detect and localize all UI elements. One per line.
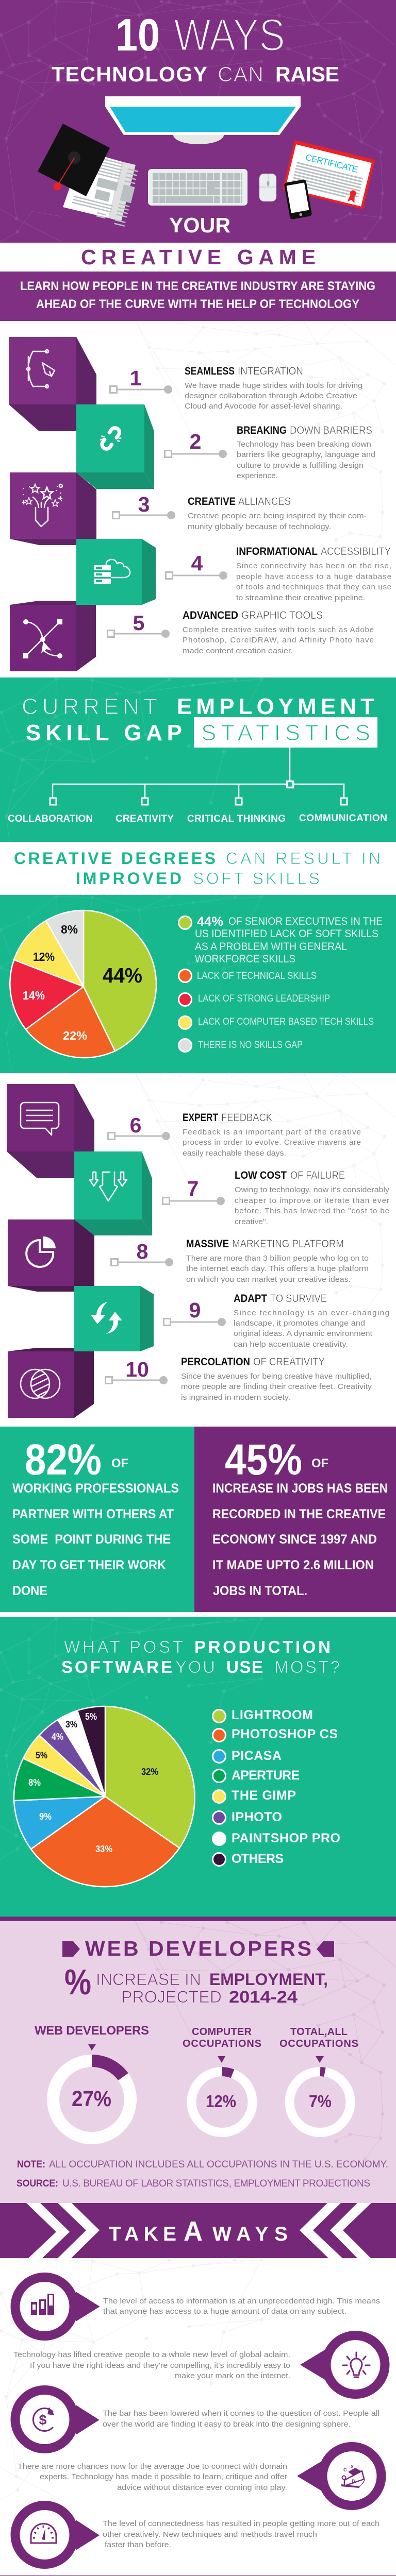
number 3: 3 xyxy=(138,493,150,516)
pin: gauge xyxy=(15,2505,100,2564)
heading: PRODUCTION xyxy=(194,1637,331,1656)
text xyxy=(103,2409,380,2429)
connector xyxy=(107,630,170,638)
item text xyxy=(181,1372,372,1402)
panel: soft skills chart xyxy=(0,895,396,1073)
item title: ADVANCED xyxy=(183,609,238,621)
icon: phone xyxy=(284,179,312,219)
icon: keyboard xyxy=(148,169,248,206)
panel: skill gap statistics xyxy=(0,677,396,842)
icon: sync arrows xyxy=(91,1302,122,1334)
heading: SOFTWARE xyxy=(61,1657,172,1676)
item title xyxy=(237,425,372,436)
number 6: 6 xyxy=(130,1113,141,1137)
text: The level of connectedness has resulted in people getting more out of each xyxy=(103,2519,380,2528)
item 10 xyxy=(105,1356,372,1402)
legend: APERTURE xyxy=(232,1768,300,1783)
item title: GRAPHIC TOOLS xyxy=(241,609,323,621)
pin: online learning xyxy=(297,2447,382,2505)
item title xyxy=(183,609,323,621)
legend: 44% xyxy=(197,914,223,929)
item title: MASSIVE xyxy=(186,1238,229,1250)
pie labels: 9% xyxy=(39,1811,52,1822)
number 7: 7 xyxy=(187,1177,199,1200)
donut: web developers xyxy=(35,2024,149,2138)
text: that anyone has access to a huge amount of data on any subject. xyxy=(103,2307,346,2316)
item text: Since technology is an ever-changing xyxy=(234,1309,389,1317)
cube 5 xyxy=(10,601,96,671)
item title xyxy=(181,1356,325,1368)
connector xyxy=(164,1318,226,1326)
icon: mouse xyxy=(259,174,276,201)
heading: USE xyxy=(226,1657,263,1676)
connector xyxy=(110,385,172,394)
item text: There are more than 3 billion people who log on to xyxy=(186,1254,369,1263)
item text: process in order to evolve. Creative mavens are xyxy=(183,1138,361,1147)
legend: PICASA xyxy=(232,1749,282,1763)
pin: dollar cycle: $ xyxy=(39,2412,47,2428)
panel: intro band xyxy=(0,272,396,321)
pie chart: software xyxy=(14,1706,195,1887)
item title xyxy=(234,1293,327,1304)
text: make your mark on the internet. xyxy=(175,2371,290,2380)
connector xyxy=(105,1376,168,1384)
legend: PHOTOSHOP CS xyxy=(232,1727,338,1741)
heading: WHAT POST xyxy=(64,1637,183,1656)
takeaway 5 xyxy=(15,2505,380,2564)
item text: cheaper to improve or iterate than ever xyxy=(235,1196,389,1205)
icon: curves xyxy=(23,619,62,658)
cube 7 xyxy=(74,1151,152,1235)
icon: pie chart xyxy=(26,1236,56,1267)
item title xyxy=(236,546,391,557)
icon: venn diagram xyxy=(20,1368,61,1399)
subheading: increase in employment: INCREASE IN xyxy=(96,1970,201,1989)
skill labels: CREATIVITY xyxy=(116,814,174,824)
panel: takeaways xyxy=(0,2258,385,2564)
panel: 82 percent stat: DAY TO GET THEIR WORK xyxy=(12,1558,166,1572)
item text: Cloud and Avocode for asset-level sharing. xyxy=(185,402,342,411)
heading: statistics box: STATISTICS xyxy=(201,720,370,745)
legend: LACK OF TECHNICAL SKILLS xyxy=(197,971,317,981)
item title: FEEDBACK xyxy=(221,1112,272,1124)
item text: more people are finding their creative feet. Creativity xyxy=(181,1382,372,1391)
item title: INFORMATIONAL xyxy=(236,546,318,557)
item title: DOWN BARRIERS xyxy=(290,425,372,436)
donut: computer occupations: 12% xyxy=(206,2092,236,2111)
icon: certificate xyxy=(283,140,375,209)
pie labels: 12% xyxy=(33,950,55,963)
number 1: 1 xyxy=(130,366,141,390)
item text: before. This has lowered the "cost to be xyxy=(235,1207,389,1215)
icon: down arrows xyxy=(90,1172,127,1201)
pie labels: 5% xyxy=(36,1750,47,1760)
icon: newspaper xyxy=(63,150,140,226)
item text: on which you can market your creative ideas. xyxy=(186,1275,351,1284)
donut: computer occupations: OCCUPATIONS xyxy=(183,2038,261,2049)
item text xyxy=(186,1254,369,1284)
item text: culture to provide a fulfilling design xyxy=(237,461,364,470)
item text: the internet each day. This offers a huge platform xyxy=(186,1264,369,1273)
item text: Complete creative suites with tools such as Adobe xyxy=(183,625,374,634)
takeaway 2 xyxy=(13,2335,385,2394)
item title: MARKETING PLATFORM xyxy=(232,1238,344,1250)
text: There are more chances now for the average Joe to connect with domain xyxy=(18,2462,287,2471)
item 3 xyxy=(112,493,367,531)
item text: made content creation easier. xyxy=(183,647,293,655)
connector xyxy=(112,511,175,519)
text xyxy=(13,2350,290,2380)
donut: web developers: 27% xyxy=(72,2087,111,2111)
cube 4 xyxy=(76,539,156,605)
panel: 82 percent stat: SOME POINT DURING THE xyxy=(12,1532,171,1547)
item 1 xyxy=(110,365,362,411)
panel: 45 percent stat: OF xyxy=(311,1456,328,1470)
item text: Technology has been breaking down xyxy=(237,440,371,449)
panel: 45 percent stat xyxy=(194,1427,396,1612)
pin: online learning: C xyxy=(343,2467,347,2472)
text: faster than before. xyxy=(105,2540,171,2549)
panel: 45 percent stat: RECORDED IN THE CREATIVE xyxy=(212,1507,386,1521)
item title: EXPERT xyxy=(183,1112,218,1124)
panel: web developers xyxy=(0,1917,396,2203)
item text: munity globally because of technology. xyxy=(188,522,331,531)
item text: can help accentuate creativity. xyxy=(234,1340,348,1349)
item title: PERCOLATION xyxy=(181,1356,250,1368)
heading: creative degrees: CAN RESULT IN xyxy=(226,849,381,868)
heading: creative degrees xyxy=(14,849,381,888)
connector xyxy=(163,1197,225,1205)
legend: WORKFORCE SKILLS xyxy=(195,953,295,965)
note and source: SOURCE: xyxy=(16,2178,58,2189)
pie labels: 32% xyxy=(141,1767,158,1777)
item title xyxy=(188,496,291,507)
pin: light bulb xyxy=(300,2335,385,2394)
text: other creatively. New techniques and methods travel much xyxy=(103,2530,317,2539)
legend xyxy=(178,914,383,1052)
heading: creative degrees: SOFT SKILLS xyxy=(193,869,320,888)
panel: 82 percent stat: PARTNER WITH OTHERS AT xyxy=(12,1507,174,1521)
item title xyxy=(183,1112,272,1124)
panel: 82 percent stat xyxy=(0,1427,194,1612)
item text: Creative people are being inspired by their com- xyxy=(188,512,367,520)
title: technology can raise: TECHNOLOGY xyxy=(52,62,207,86)
donut: total all occupations: TOTAL,ALL xyxy=(290,2026,348,2038)
number 5: 5 xyxy=(133,611,144,635)
connector xyxy=(108,1132,170,1140)
legend: THERE IS NO SKILLS GAP xyxy=(198,1040,303,1050)
note and source: NOTE: xyxy=(17,2159,45,2170)
item text: Owing to technology, now it's considerably xyxy=(235,1185,390,1194)
donut: computer occupations: COMPUTER xyxy=(192,2026,252,2038)
cube 6 xyxy=(7,1084,94,1178)
icon: graduation cap xyxy=(38,124,110,196)
legend: LACK OF STRONG LEADERSHIP xyxy=(198,993,330,1004)
item title xyxy=(185,365,303,377)
heading: creative degrees: CREATIVE DEGREES xyxy=(14,849,216,868)
panel: 45 percent stat: ECONOMY SINCE 1997 AND xyxy=(212,1532,377,1547)
legend xyxy=(212,1708,340,1866)
item text xyxy=(188,512,367,531)
number 2: 2 xyxy=(190,430,201,453)
item title: LOW COST xyxy=(235,1170,287,1181)
skill labels: COMMUNICATION xyxy=(299,813,387,824)
panel: 45 percent stat: 45% xyxy=(225,1435,302,1484)
icon: broken link xyxy=(96,423,125,453)
number 8: 8 xyxy=(137,1240,148,1263)
donut: total all occupations: OCCUPATIONS xyxy=(279,2038,358,2049)
title: technology can raise xyxy=(52,62,339,86)
item title: BREAKING xyxy=(237,425,287,436)
item title: TO SURVIVE xyxy=(270,1293,327,1304)
item text: landscape, it promotes change and xyxy=(234,1319,365,1328)
item text: designer collaboration through Adobe Creative xyxy=(185,392,357,400)
note and source: U.S. BUREAU OF LABOR STATISTICS, EMPLOYMENT PROJECTIONS xyxy=(62,2178,370,2189)
item text xyxy=(183,1128,361,1158)
title: 10 ways xyxy=(116,9,285,60)
heading: skill gap: SKILL GAP xyxy=(26,720,182,745)
icon: certificate: CERTIFICATE xyxy=(305,152,359,175)
item text: barriers like geography, language and xyxy=(237,450,375,459)
item title: ADAPT xyxy=(234,1293,267,1304)
item title: INTEGRATION xyxy=(238,365,303,377)
title: 10 ways: 10 xyxy=(116,9,160,60)
heading xyxy=(61,1637,340,1676)
item text: people have access to a huge database xyxy=(236,572,391,581)
text xyxy=(103,2519,380,2549)
item title: OF CREATIVITY xyxy=(253,1356,325,1368)
panel: 82 percent stat: WORKING PROFESSIONALS xyxy=(12,1481,179,1496)
item 9 xyxy=(164,1293,389,1349)
panel: 45 percent stat: JOBS IN TOTAL. xyxy=(213,1584,307,1598)
pie labels: 8% xyxy=(61,923,78,936)
text xyxy=(103,2297,380,2316)
donut: total all occupations: 7% xyxy=(309,2092,332,2111)
item text: to streamline their creative pipeline. xyxy=(236,594,365,602)
donut: computer occupations xyxy=(183,2026,261,2132)
cube 3 xyxy=(10,472,96,545)
number 9: 9 xyxy=(189,1298,201,1322)
legend: OTHERS xyxy=(232,1852,284,1866)
subheading: increase in employment: EMPLOYMENT, xyxy=(209,1970,328,1989)
note and source xyxy=(16,2159,388,2189)
legend: LACK OF COMPUTER BASED TECH SKILLS xyxy=(198,1016,374,1027)
legend: US IDENTIFIED LACK OF SOFT SKILLS xyxy=(195,928,378,940)
panel: takeaways banner: TAKE xyxy=(109,2223,176,2245)
note and source: ALL OCCUPATION INCLUDES ALL OCCUPATIONS IN THE U.S. ECONOMY. xyxy=(49,2159,388,2170)
panel: 82 percent stat: 82% xyxy=(25,1435,102,1484)
panel: post production software xyxy=(0,1617,396,1917)
panel: takeaways banner xyxy=(0,2203,396,2258)
pie labels: 14% xyxy=(23,989,45,1002)
item text: Since the avenues for being creative have multiplied, xyxy=(181,1372,372,1381)
title: your: YOUR xyxy=(169,213,230,237)
panel: ways 1 to 5 xyxy=(9,318,396,671)
item text xyxy=(185,381,362,411)
cube 1 xyxy=(9,337,96,431)
panel: 82 percent stat: OF xyxy=(111,1456,128,1470)
icon: creative fireworks xyxy=(22,484,62,527)
panel: header xyxy=(0,0,396,243)
text: If you have the right ideas and they're compelling, it's incredibly easy to xyxy=(30,2361,290,2370)
panel: takeaways banner: A xyxy=(184,2216,203,2247)
subheading: increase in employment: % xyxy=(64,1962,91,2002)
item text: original ideas. A dynamic environment xyxy=(234,1329,373,1338)
item text: easily reachable these days. xyxy=(183,1149,286,1158)
connector xyxy=(166,571,227,580)
pie chart: soft skills xyxy=(10,910,156,1058)
pin: dollar cycle xyxy=(15,2390,100,2449)
donut: web developers: WEB DEVELOPERS xyxy=(35,2024,149,2038)
pin: bars xyxy=(15,2277,100,2336)
item title: CREATIVE xyxy=(188,496,236,507)
pie labels: 4% xyxy=(52,1732,63,1742)
heading: creative degrees: IMPROVED xyxy=(76,869,182,888)
icon: pen tool xyxy=(27,350,55,388)
item 8 xyxy=(111,1238,369,1284)
panel: sources footer xyxy=(0,2575,396,2576)
item 7 xyxy=(163,1170,390,1226)
number 4: 4 xyxy=(191,551,203,575)
takeaway 3 xyxy=(15,2390,380,2449)
item text: Feedback is an important part of the creative xyxy=(183,1128,361,1137)
heading: YOU xyxy=(175,1657,215,1676)
pie labels: 22% xyxy=(63,1029,87,1042)
panel: 45 percent stat: IT MADE UPTO 2.6 MILLION xyxy=(212,1558,374,1572)
icon: monitor xyxy=(105,96,301,144)
pie labels: 5% xyxy=(85,1711,97,1722)
heading: web developers: WEB DEVELOPERS xyxy=(85,1937,311,1960)
title: technology can raise: CAN xyxy=(218,62,263,86)
skill labels: CRITICAL THINKING xyxy=(187,814,286,824)
pie labels: 33% xyxy=(95,1844,112,1854)
panel: ways 6 to 10 xyxy=(7,1072,396,1418)
heading: creative game: CREATIVE GAME xyxy=(81,245,316,269)
icon: cloud servers xyxy=(94,560,130,584)
item text xyxy=(183,625,374,655)
pie labels xyxy=(28,1711,158,1854)
legend: THE GIMP xyxy=(232,1788,296,1803)
connector xyxy=(165,450,227,458)
cube 10 xyxy=(8,1348,94,1418)
text: The bar has been lowered when it comes to the question of cost. People all xyxy=(103,2409,380,2418)
text: over the world are finding it easy to break into the designing sphere. xyxy=(103,2420,351,2429)
item 5 xyxy=(107,609,374,655)
heading: current employment: EMPLOYMENT xyxy=(177,694,374,719)
text: experts. Technology has made it possible to learn, critique and offer xyxy=(40,2472,287,2481)
text: advice without distance ever coming into play. xyxy=(117,2483,287,2492)
item text: of tools and techniques that they can use xyxy=(236,583,391,591)
item text: Photoshop, CorelDRAW, and Affinity Photo have xyxy=(183,636,374,645)
text xyxy=(18,2462,287,2492)
item text xyxy=(235,1185,390,1226)
skill tree connector xyxy=(50,748,347,805)
panel: intro band: AHEAD OF THE CURVE WITH THE HELP OF TECHNOLOGY xyxy=(36,297,359,311)
text: The level of access to information is at an unprecedented high. This means xyxy=(103,2297,380,2306)
title: 10 ways: WAYS xyxy=(174,9,285,60)
panel: 82 percent stat: DONE xyxy=(12,1584,47,1598)
item 2 xyxy=(165,425,375,480)
pie labels: 3% xyxy=(65,1719,77,1730)
pie labels xyxy=(23,923,142,1042)
legend: PAINTSHOP PRO xyxy=(232,1831,340,1845)
donut: total all occupations xyxy=(279,2026,358,2132)
pin: online learning: X xyxy=(351,2464,354,2469)
subheading: increase in employment xyxy=(64,1962,328,2006)
pie labels: 44% xyxy=(103,963,142,987)
icon: speech bubble xyxy=(21,1103,59,1135)
legend: IPHOTO xyxy=(232,1810,282,1824)
item 4 xyxy=(166,546,391,602)
legend: AS A PROBLEM WITH GENERAL xyxy=(195,941,347,953)
item text xyxy=(236,562,391,602)
item text xyxy=(234,1309,389,1349)
cube 9 xyxy=(74,1286,154,1351)
cube 2 xyxy=(76,404,154,489)
item title: ALLIANCES xyxy=(238,496,291,507)
item text: experience. xyxy=(237,471,278,480)
legend: LIGHTROOM xyxy=(232,1708,313,1722)
item text: We have made huge strides with tools for driving xyxy=(185,381,362,390)
item text: creative". xyxy=(235,1217,268,1226)
takeaway 4 xyxy=(18,2447,382,2505)
title: technology can raise: RAISE xyxy=(275,62,339,86)
panel: takeaways banner: WAYS xyxy=(212,2223,288,2245)
subheading: increase in employment: 2014-24 xyxy=(229,1988,298,2006)
pie labels: 8% xyxy=(28,1777,41,1788)
item text: Since connectivity has been on the rise, xyxy=(236,562,391,570)
item title: SEAMLESS xyxy=(185,365,235,377)
subheading: increase in employment: PROJECTED xyxy=(121,1988,222,2006)
item text: is ingrained in modern society. xyxy=(181,1393,290,1402)
skill labels: COLLABORATION xyxy=(8,814,93,824)
heading: current employment: CURRENT xyxy=(22,694,157,719)
skill labels xyxy=(8,813,387,824)
legend: OF SENIOR EXECUTIVES IN THE xyxy=(228,916,383,927)
heading: MOST? xyxy=(274,1657,340,1676)
heading: current employment xyxy=(22,694,374,719)
item title xyxy=(235,1170,345,1181)
item title xyxy=(186,1238,344,1250)
item title: OF FAILURE xyxy=(290,1170,345,1181)
text: Technology has lifted creative people to a whole new level of global aclaim. xyxy=(13,2350,290,2359)
item text xyxy=(237,440,375,480)
item 6 xyxy=(108,1112,361,1158)
number 10: 10 xyxy=(125,1358,149,1381)
cube 8 xyxy=(8,1219,94,1292)
takeaway 1 xyxy=(15,2277,380,2336)
pin: online learning: B xyxy=(352,2479,355,2484)
connector xyxy=(111,1258,173,1266)
